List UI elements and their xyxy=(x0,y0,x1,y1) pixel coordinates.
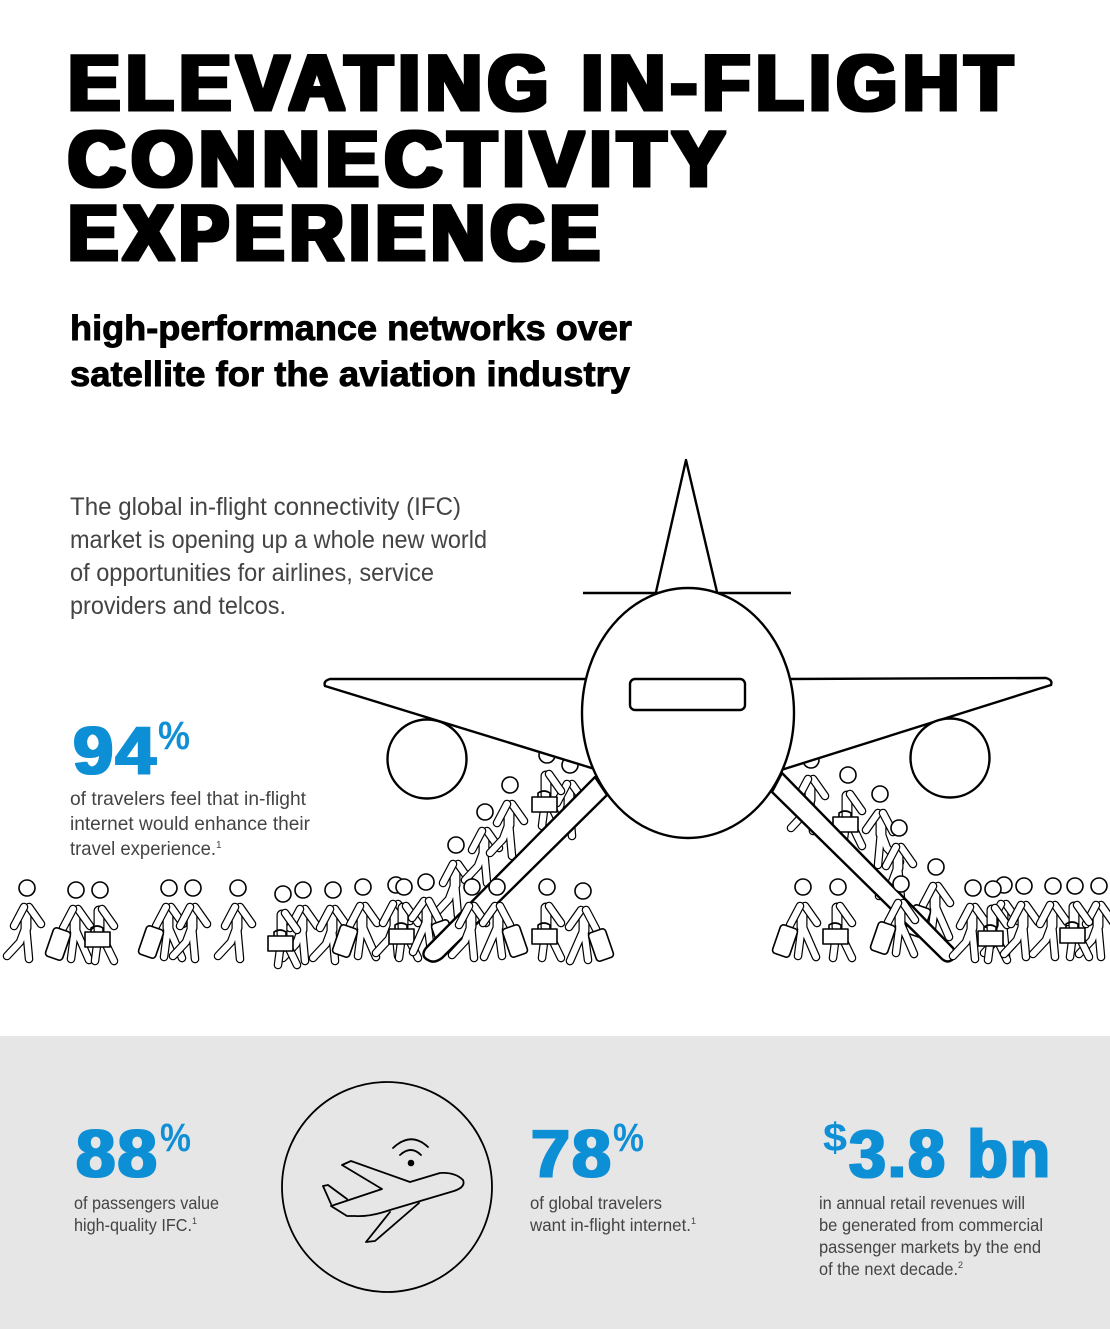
icon: plane with wifi in circle xyxy=(282,1082,492,1292)
stat: 94 percent xyxy=(70,713,310,860)
subtitle: high-performance networks over xyxy=(70,309,632,348)
stat: 88 percent: % xyxy=(160,1116,191,1160)
illustration: passengers boarding plane xyxy=(7,460,1110,965)
stat: 88 percent: 88 xyxy=(76,1116,159,1192)
passengers behind the stairs xyxy=(7,747,950,965)
stat: 88 percent: 1 xyxy=(192,1216,197,1226)
stat: 94 percent: 1 xyxy=(216,840,222,851)
stat: 78 percent: want in-flight internet. xyxy=(529,1215,691,1235)
stat: 3.8 bn revenue xyxy=(819,1116,1052,1279)
stat: 78 percent: of global travelers xyxy=(530,1193,662,1213)
stat: 94 percent: 94 xyxy=(73,713,158,789)
cockpit window xyxy=(630,679,745,710)
stat: 3.8 bn revenue: 3.8 bn xyxy=(849,1116,1052,1192)
intro text: of opportunities for airlines, service xyxy=(70,559,434,587)
subtitle: satellite for the aviation industry xyxy=(70,355,631,394)
subtitle xyxy=(70,309,632,394)
stat: 94 percent: % xyxy=(158,714,190,758)
intro text: market is opening up a whole new world xyxy=(70,526,487,554)
stat: 78 percent: 1 xyxy=(691,1216,696,1226)
stat: 3.8 bn revenue: in annual retail revenues will xyxy=(819,1193,1025,1213)
stat: 3.8 bn revenue: $ xyxy=(823,1116,847,1160)
grey band xyxy=(0,1036,1110,1329)
fuselage xyxy=(582,588,794,838)
stat: 78 percent: 78 xyxy=(531,1116,613,1192)
stat: 3.8 bn revenue: 2 xyxy=(958,1260,963,1270)
intro text xyxy=(70,493,487,620)
passengers in front of the stairs xyxy=(452,876,1110,962)
plane wings xyxy=(325,678,1051,771)
stat: 78 percent xyxy=(529,1116,696,1235)
title: ELEVATING IN-FLIGHT xyxy=(68,38,1018,127)
stat: 3.8 bn revenue: be generated from commercial xyxy=(819,1215,1043,1235)
stat: 88 percent: high-quality IFC. xyxy=(74,1215,192,1235)
intro text: The global in-flight connectivity (IFC) xyxy=(70,493,461,521)
stat: 88 percent xyxy=(74,1116,219,1235)
stat: 78 percent: % xyxy=(613,1116,644,1160)
stat: 3.8 bn revenue: of the next decade. xyxy=(819,1259,958,1279)
engines xyxy=(388,718,990,798)
stat: 88 percent: of passengers value xyxy=(74,1193,219,1213)
stairs xyxy=(423,773,955,962)
stat: 94 percent: internet would enhance their xyxy=(70,813,310,835)
title: CONNECTIVITY xyxy=(68,114,731,203)
stat: 3.8 bn revenue: passenger markets by the end xyxy=(819,1237,1041,1257)
title xyxy=(68,38,1018,277)
stat: 94 percent: travel experience. xyxy=(70,838,216,860)
plane tail xyxy=(583,460,791,593)
intro text: providers and telcos. xyxy=(70,592,286,620)
title: EXPERIENCE xyxy=(68,188,605,277)
stat: 94 percent: of travelers feel that in-flight xyxy=(70,788,307,810)
